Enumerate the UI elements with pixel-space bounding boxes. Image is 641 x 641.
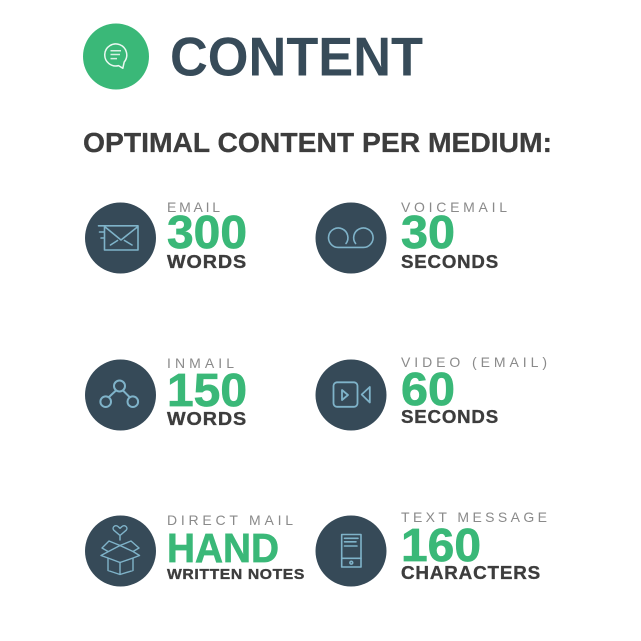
- value: 30: [401, 206, 455, 258]
- icon: open box with heart: [85, 516, 156, 586]
- panel: direct mail: [85, 512, 305, 586]
- subheading: OPTIMAL CONTENT PER MEDIUM:: [83, 127, 552, 158]
- panel: text message: [316, 509, 547, 586]
- icon: envelope: [85, 202, 156, 274]
- label: INMAIL: [167, 355, 234, 371]
- unit: SECONDS: [401, 407, 499, 427]
- panel: voicemail: [316, 199, 507, 274]
- title: CONTENT: [170, 26, 423, 88]
- panel: email: [85, 199, 247, 274]
- label: VIDEO (EMAIL): [401, 354, 547, 370]
- label: EMAIL: [167, 199, 220, 215]
- label: VOICEMAIL: [401, 199, 507, 215]
- value: 60: [401, 363, 455, 415]
- panel: inmail: [85, 355, 247, 430]
- icon: connected nodes: [85, 360, 156, 430]
- header icon: speech bubble: [83, 24, 149, 90]
- label: DIRECT MAIL: [167, 512, 293, 528]
- icon: voicemail: [316, 202, 386, 274]
- unit: WORDS: [167, 409, 247, 429]
- panel: video email: [316, 354, 547, 430]
- value: 150: [167, 364, 247, 416]
- value: 300: [167, 206, 247, 258]
- unit: WORDS: [167, 252, 247, 272]
- unit: WRITTEN NOTES: [167, 566, 305, 583]
- icon: mobile phone: [316, 516, 386, 586]
- value: HAND: [167, 525, 279, 571]
- icon: video camera: [316, 360, 386, 430]
- unit: CHARACTERS: [401, 563, 541, 583]
- label: TEXT MESSAGE: [401, 509, 547, 525]
- value: 160: [401, 519, 481, 571]
- unit: SECONDS: [401, 252, 499, 272]
